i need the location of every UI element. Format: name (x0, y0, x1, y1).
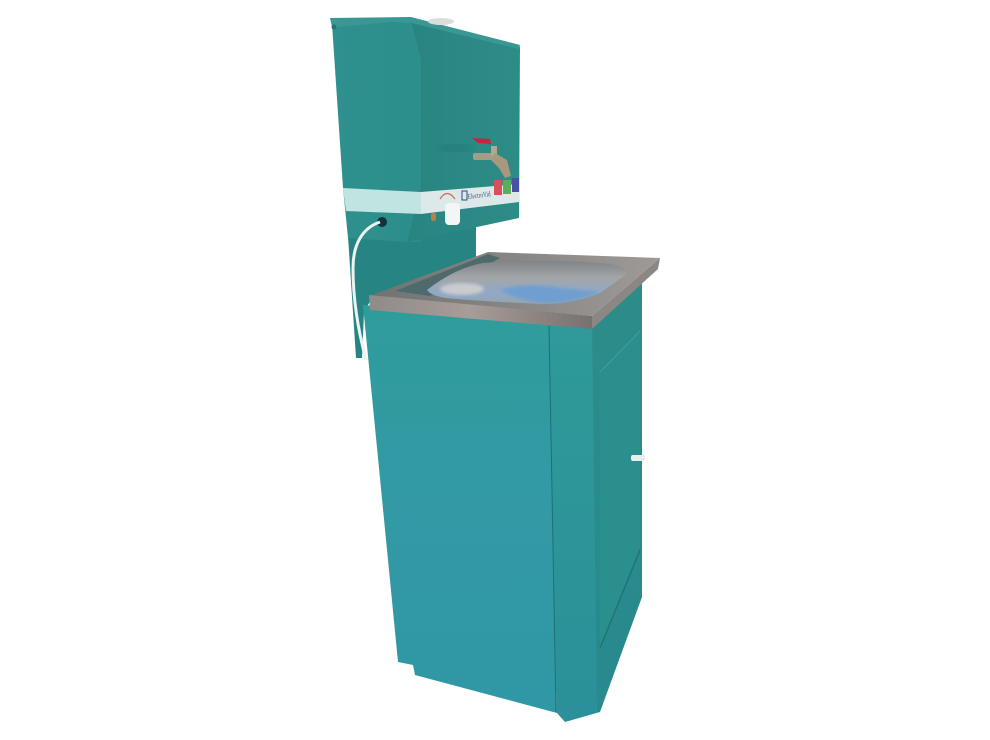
counter top surface (369, 252, 660, 316)
countertop (369, 252, 660, 329)
tank left face (332, 18, 421, 242)
sink bowl (427, 261, 627, 304)
hinge (332, 24, 336, 30)
lid cap (428, 18, 454, 25)
brand label: ElectroVid (467, 189, 491, 201)
cabinet side face (592, 275, 642, 712)
door latch (631, 455, 645, 461)
tank right face (392, 18, 520, 242)
cabinet front face (363, 305, 557, 713)
right band (421, 184, 519, 214)
cable grommet (377, 217, 387, 227)
cabinet (363, 275, 645, 722)
back plate (348, 225, 476, 358)
tank (330, 17, 520, 242)
blue badge (512, 178, 519, 192)
red badge (494, 180, 502, 195)
front band (343, 188, 421, 214)
cabinet corner face (549, 320, 600, 722)
dial arc (440, 194, 455, 199)
faucet red handle (472, 138, 491, 144)
green badge (503, 180, 511, 194)
power cable (353, 222, 380, 360)
counter front edge (369, 295, 592, 329)
counter right edge (592, 258, 660, 329)
indicator lamp (431, 213, 436, 221)
dial knob (445, 203, 460, 225)
tank lid (330, 17, 520, 49)
faucet (437, 138, 511, 178)
bowl reflection (500, 285, 600, 303)
